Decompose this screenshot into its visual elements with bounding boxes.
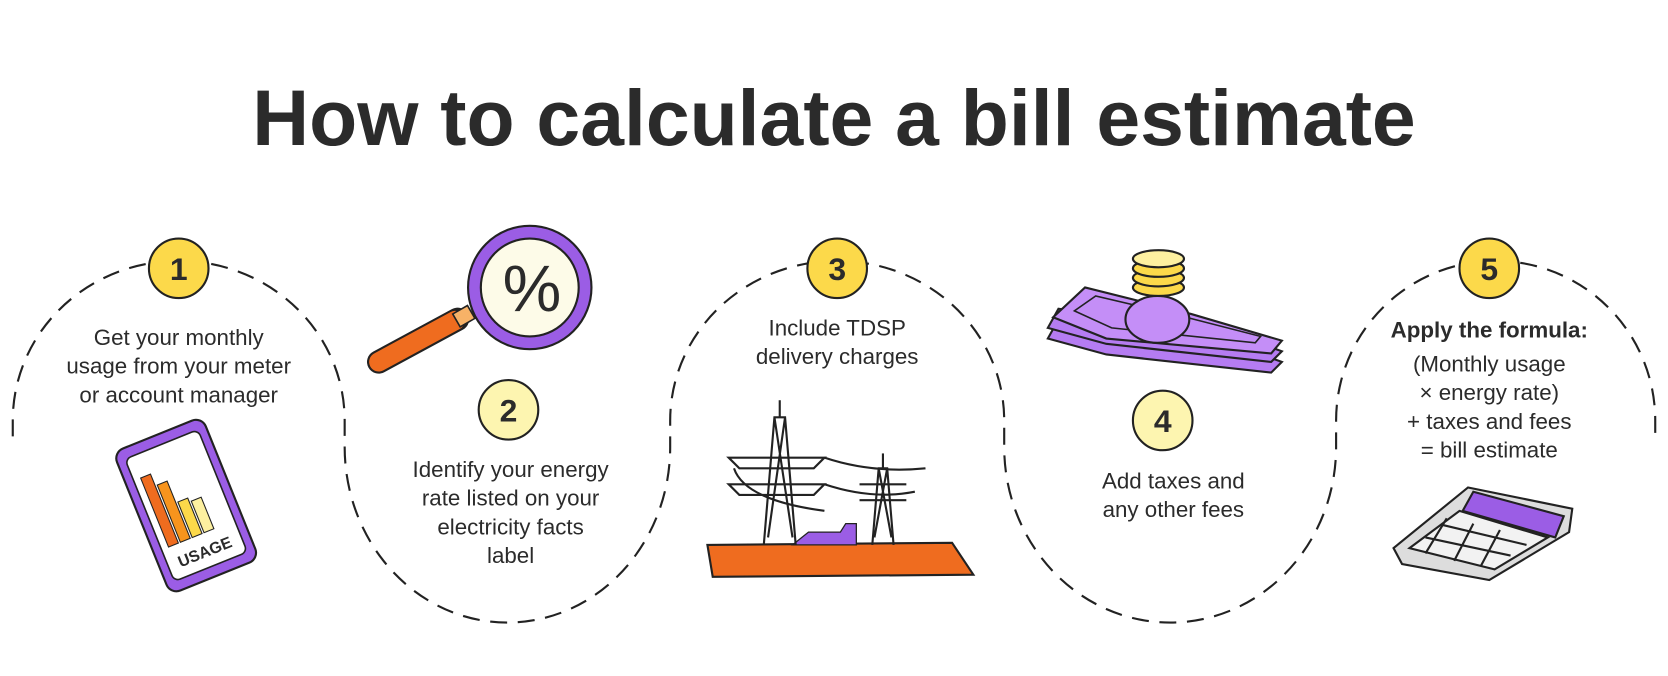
badge 2	[479, 380, 538, 440]
dashed wave path	[13, 261, 1655, 623]
text 1: Get your monthly	[94, 325, 265, 350]
badge 1: 1	[170, 251, 188, 287]
text 5: = bill estimate	[1421, 438, 1558, 463]
text 4: any other fees	[1103, 497, 1244, 522]
badge 5: 5	[1480, 251, 1498, 287]
icon: phone usage: USAGE	[176, 534, 235, 571]
step 5	[1391, 239, 1588, 580]
badge 3: 3	[828, 251, 846, 287]
text 2: label	[487, 543, 534, 568]
text 1: or account manager	[79, 382, 279, 407]
badge 4: 4	[1154, 403, 1172, 439]
step 1	[66, 239, 292, 594]
badge 1	[149, 239, 208, 298]
badge 2: 2	[500, 393, 517, 429]
text 2: Identify your energy	[413, 457, 609, 482]
text 5: + taxes and fees	[1407, 409, 1572, 434]
text 5: Apply the formula:	[1391, 317, 1588, 342]
title: How to calculate a bill estimate	[252, 74, 1416, 162]
badge 5	[1460, 239, 1519, 298]
text 3: Include TDSP	[769, 315, 906, 340]
step 3	[707, 239, 973, 577]
badge 4	[1133, 391, 1192, 450]
icon: calculator	[1394, 487, 1572, 580]
text 3: delivery charges	[756, 344, 918, 369]
text 4: Add taxes and	[1102, 469, 1245, 494]
step 2	[379, 226, 609, 568]
text 5: × energy rate)	[1419, 380, 1559, 405]
text 2: rate listed on your	[422, 486, 600, 511]
icon: money and coins	[1048, 250, 1282, 373]
text 1: usage from your meter	[66, 354, 292, 379]
step 4	[1048, 250, 1282, 522]
text 2: electricity facts	[437, 514, 584, 539]
icon: phone usage	[113, 417, 259, 594]
icon: magnifier percent	[379, 226, 591, 362]
icon: power towers	[707, 400, 973, 577]
text 5: (Monthly usage	[1413, 352, 1566, 377]
icon: magnifier percent: %	[503, 251, 561, 325]
badge 3	[807, 239, 867, 298]
